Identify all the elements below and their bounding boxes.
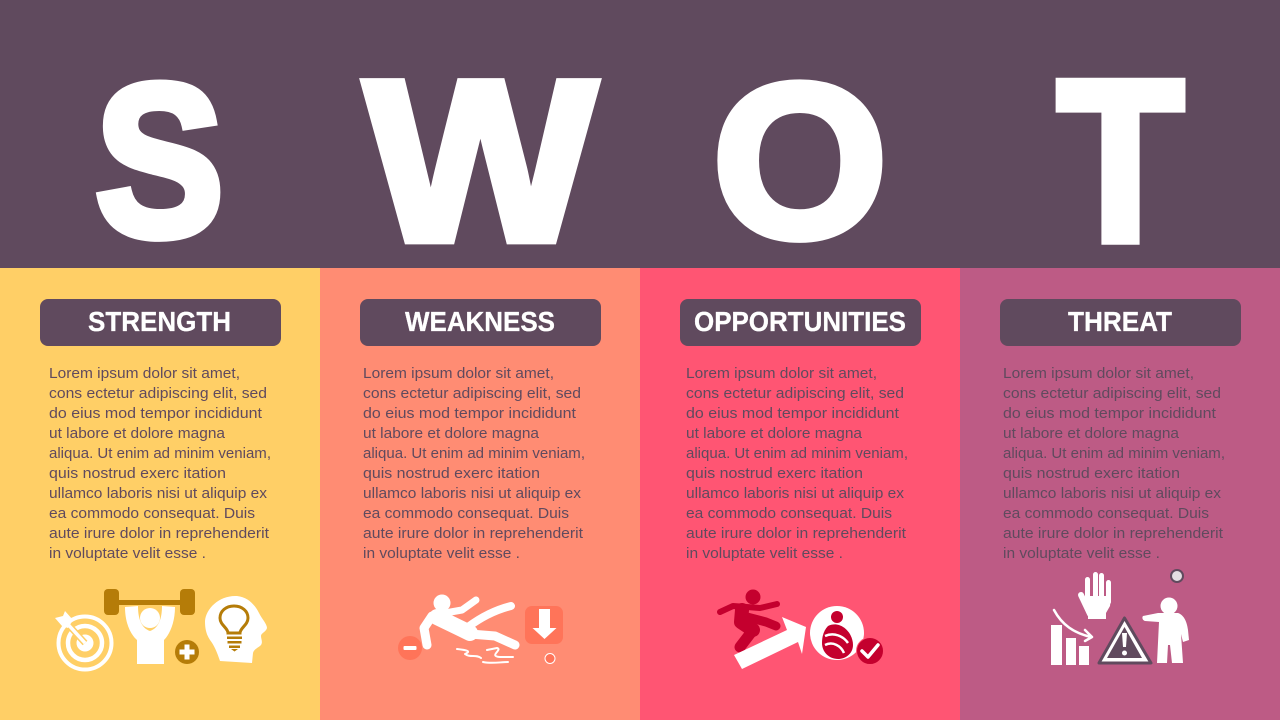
text block: strength: cons ectetur adipiscing elit, sed [49,386,267,402]
icon: small dot [545,654,555,664]
text block: weakness: aliqua. Ut enim ad minim veniam, [363,446,585,462]
text block: threat [1003,366,1225,562]
heading: weakness [360,299,601,346]
text block: strength: do eius mod tempor incididunt [49,406,262,422]
text block: opportunities: cons ectetur adipiscing elit, sed [686,386,904,402]
text block: weakness: ea commodo consequat. Duis [363,506,569,522]
icon: head with light bulb [205,596,267,663]
text block: opportunities: ut labore et dolore magna [686,426,863,442]
icon: down arrow tile [525,606,563,644]
heading: threat: THREAT [1068,306,1172,337]
panel: threat [960,268,1280,720]
icon: opportunities group [720,590,884,669]
icon: upward arrow [734,617,806,669]
text block: strength: Lorem ipsum dolor sit amet, [49,366,240,382]
icon: warning triangle [1099,618,1151,663]
text block: opportunities: ullamco laboris nisi ut aliquip ex [686,486,905,502]
panel: opportunities [640,268,960,720]
text block: opportunities: in voluptate velit esse . [686,546,843,562]
text block: weakness: in voluptate velit esse . [363,546,520,562]
heading: threat [1000,299,1241,346]
icon: check badge [856,638,884,664]
text block: opportunities: Lorem ipsum dolor sit amet, [686,366,877,382]
icon: leaping figure [720,590,777,647]
text block: threat: ea commodo consequat. Duis [1003,506,1209,522]
text block: strength: aute irure dolor in reprehenderit [49,526,269,542]
text block: threat: quis nostrud exerc itation [1003,466,1180,482]
icon: plus badge [175,640,199,664]
icon: slipping person [424,594,515,663]
text block: weakness: ut labore et dolore magna [363,426,540,442]
heading: strength: STRENGTH [88,306,231,337]
icon: pointing person [1142,598,1189,663]
heading: opportunities [680,299,921,346]
icon: strength group [55,589,267,670]
icon: small dot [1171,570,1183,582]
text block: threat: ullamco laboris nisi ut aliquip ex [1003,486,1222,502]
text block: threat: in voluptate velit esse . [1003,546,1160,562]
title letter S: S [95,41,224,281]
text block: threat: Lorem ipsum dolor sit amet, [1003,366,1194,382]
text block: strength: ut labore et dolore magna [49,426,226,442]
header band [0,0,1280,268]
text block: opportunities: do eius mod tempor incididunt [686,406,899,422]
title letter W: W [365,33,596,289]
text block: opportunities: aute irure dolor in reprehenderit [686,526,906,542]
icon: minus badge [398,636,422,660]
text block: threat: aute irure dolor in reprehenderit [1003,526,1223,542]
text block: threat: ut labore et dolore magna [1003,426,1180,442]
icon: raised hand [1081,574,1111,619]
text block: weakness: ullamco laboris nisi ut aliquip ex [363,486,582,502]
text block: weakness: aute irure dolor in reprehenderit [363,526,583,542]
text block: strength: aliqua. Ut enim ad minim veniam, [49,446,271,462]
text block: weakness: quis nostrud exerc itation [363,466,540,482]
text block: weakness: do eius mod tempor incididunt [363,406,576,422]
text block: weakness [363,366,585,562]
text block: opportunities: ea commodo consequat. Duis [686,506,892,522]
text block: weakness: Lorem ipsum dolor sit amet, [363,366,554,382]
text block: strength: ullamco laboris nisi ut aliquip ex [49,486,268,502]
icon: falling bar chart [1051,610,1092,665]
text block: threat: cons ectetur adipiscing elit, sed [1003,386,1221,402]
icon: person in circle [810,606,864,660]
text block: opportunities: aliqua. Ut enim ad minim veniam, [686,446,908,462]
icon: weightlifter [125,606,175,664]
icon: barbell [104,589,195,615]
text block: threat: do eius mod tempor incididunt [1003,406,1216,422]
heading: strength [40,299,281,346]
text block: strength: quis nostrud exerc itation [49,466,226,482]
text block: strength: in voluptate velit esse . [49,546,206,562]
icon: target [55,611,112,670]
text block: opportunities [686,366,908,562]
text block: weakness: cons ectetur adipiscing elit, sed [363,386,581,402]
text block: threat: aliqua. Ut enim ad minim veniam, [1003,446,1225,462]
panel: weakness [320,268,640,720]
text block: strength: ea commodo consequat. Duis [49,506,255,522]
icon: weakness group [398,594,563,664]
heading: opportunities: OPPORTUNITIES [694,306,906,337]
text block: opportunities: quis nostrud exerc itation [686,466,863,482]
title letter T: T [1058,34,1183,289]
text block: strength [49,366,271,562]
icon: threat group [1051,570,1189,665]
title letter O: O [713,39,887,283]
heading: weakness: WEAKNESS [405,306,555,337]
panel: strength [0,268,320,720]
